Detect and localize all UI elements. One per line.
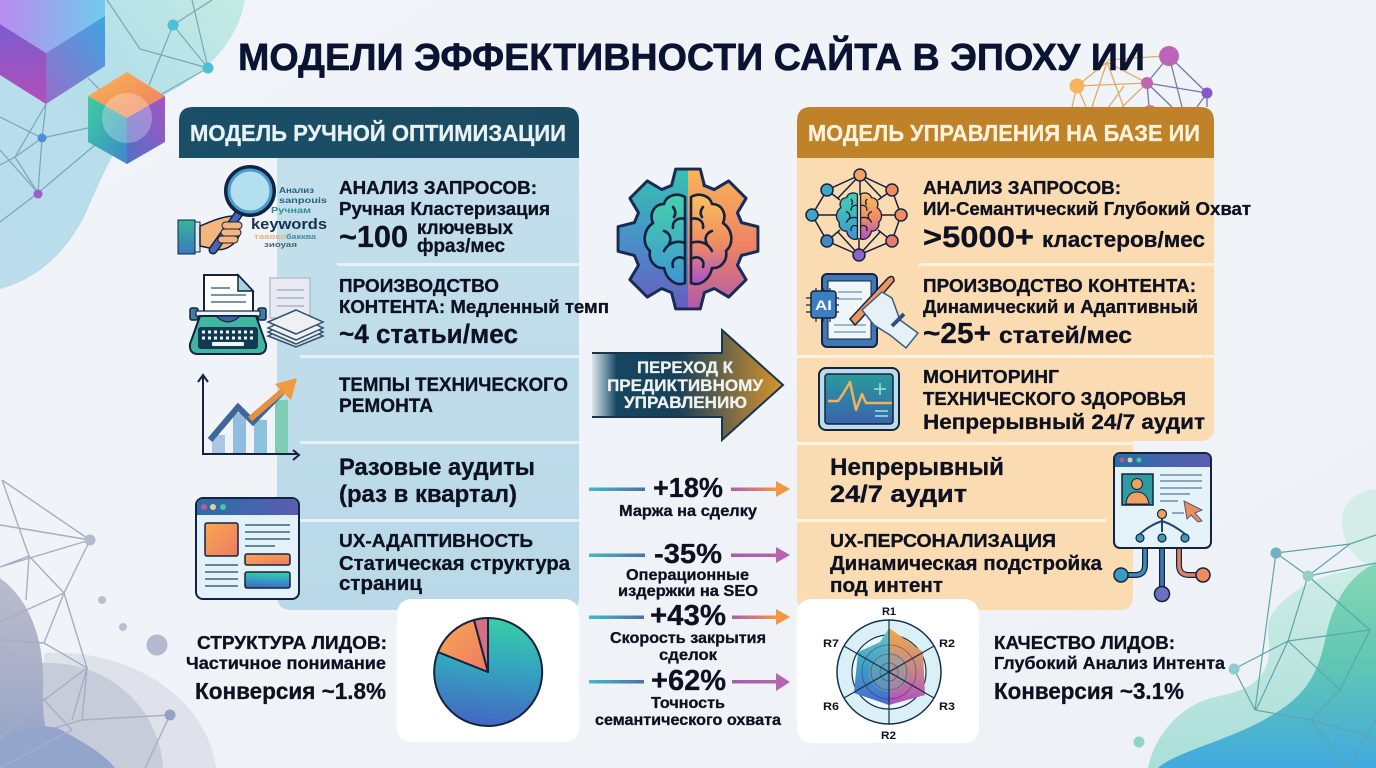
radar chart card: R7	[823, 638, 839, 650]
text block: UX personalization: Динамическая подстройка	[830, 553, 1103, 575]
text block: one-off audits: (раз в квартал)	[339, 481, 517, 508]
decoration: bottom-left blobs and network	[0, 480, 216, 768]
text block: query analysis: кластеров/мес	[1042, 227, 1205, 252]
text block: content production: статей/мес	[999, 322, 1132, 348]
text block: query analysis: Ручная Кластеризация	[339, 198, 550, 219]
panel body	[277, 158, 579, 610]
icon: AI tablet and robot hand: AI	[815, 297, 832, 313]
text block: query analysis: ~100	[339, 219, 408, 254]
text block: technical health monitoring: МОНИТОРИНГ	[923, 366, 1060, 387]
text block: technical health monitoring: Непрерывный 24/7 аудит	[923, 411, 1205, 434]
icon: browser window static layout	[196, 498, 299, 599]
icon: growth chart	[198, 375, 299, 460]
metric: semantic coverage accuracy: +62%	[651, 665, 726, 697]
panel header	[797, 107, 1214, 158]
text block: query analysis: ИИ-Семантический Глубокий Охват	[923, 198, 1251, 219]
text block: lead quality: Глубокий Анализ Интента	[994, 653, 1225, 673]
metric: semantic coverage accuracy: Точность	[651, 695, 725, 712]
text block: query analysis: АНАЛИЗ ЗАПРОСОВ:	[339, 177, 537, 198]
icon: gear with brain	[618, 169, 758, 309]
text block: UX personalization	[830, 530, 1103, 597]
text block: continuous audit: 24/7 аудит	[830, 481, 967, 508]
metric: SEO operating costs	[589, 538, 790, 600]
icon: magnifier with hand and keywords: sanpouis	[279, 196, 328, 205]
text block: technical health monitoring: ТЕХНИЧЕСКОГО ЗДОРОВЬЯ	[923, 388, 1186, 409]
text block: content production: ПРОИЗВОДСТВО КОНТЕНТА:	[923, 275, 1196, 296]
metric: margin per deal	[589, 472, 790, 520]
icon: personalized browser with branches	[1114, 453, 1211, 602]
text block: technical repair pace: ТЕМПЫ ТЕХНИЧЕСКОГО	[339, 375, 568, 396]
text block: lead structure	[186, 632, 387, 704]
text block: query analysis	[923, 177, 1251, 254]
arrow: transition to predictive management: ПРЕДИКТИВНОМУ	[607, 376, 763, 395]
text block: UX adaptivity: страниц	[339, 573, 423, 595]
icon: brain in neural network	[806, 169, 907, 261]
arrow: transition to predictive management	[592, 330, 783, 440]
text block: technical repair pace	[339, 375, 568, 417]
radar chart card: R1	[882, 606, 896, 618]
text block: one-off audits: Разовые аудиты	[339, 454, 535, 481]
icon: magnifier with hand and keywords: Анализ	[279, 186, 314, 195]
text block: query analysis	[339, 177, 550, 257]
decoration: top-right network	[1070, 46, 1212, 119]
text block: one-off audits	[339, 454, 535, 508]
text block: content production: КОНТЕНТА: Медленный темп	[339, 296, 609, 317]
icon: magnifier with hand and keywords: keywords	[251, 216, 327, 233]
metric: deal closing speed	[589, 600, 790, 664]
panel body	[797, 158, 1214, 610]
arrow: transition to predictive management: УПРАВЛЕНИЮ	[624, 393, 747, 412]
decoration: purple cube	[0, 0, 105, 104]
metric: SEO operating costs: -35%	[654, 538, 722, 569]
icon: magnifier with hand and keywords	[178, 168, 328, 254]
decoration: bottom-right blobs and network	[1134, 489, 1376, 768]
panel: AI management model	[797, 107, 1251, 610]
panel header	[179, 107, 579, 158]
text block: UX adaptivity	[339, 530, 571, 595]
radar chart card	[797, 599, 979, 743]
text block: content production: Динамический и Адаптивный	[923, 296, 1198, 317]
text block: content production: ~4 статьи/мес	[339, 319, 518, 349]
text block: content production: ~25+	[923, 318, 991, 350]
text block: query analysis: >5000+	[923, 221, 1034, 254]
panel heading: МОДЕЛЬ РУЧНОЙ ОПТИМИЗАЦИИ	[190, 119, 566, 146]
panel heading: МОДЕЛЬ УПРАВЛЕНИЯ НА БАЗЕ ИИ	[808, 120, 1200, 146]
text block: technical health monitoring	[923, 366, 1205, 434]
text block: technical repair pace: РЕМОНТА	[339, 396, 433, 417]
decoration: top-left blob and network	[0, 0, 245, 289]
metric: deal closing speed: сделок	[659, 647, 717, 664]
metric: semantic coverage accuracy: семантического охвата	[595, 712, 781, 729]
metric: deal closing speed: Скорость закрытия	[610, 630, 766, 647]
text block: lead quality	[994, 632, 1225, 704]
text block: continuous audit: Непрерывный	[830, 454, 1004, 481]
text block: lead structure: СТРУКТУРА ЛИДОВ:	[197, 632, 387, 653]
icon: magnifier with hand and keywords: Ручнам	[271, 206, 311, 215]
metric: semantic coverage accuracy	[589, 665, 790, 729]
text block: query analysis: ключевых	[417, 218, 513, 239]
text block: UX adaptivity: Статическая структура	[339, 553, 571, 575]
metric: SEO operating costs: Операционные	[626, 567, 749, 584]
metric: SEO operating costs: издержки на SEO	[618, 583, 758, 600]
text block: content production	[923, 275, 1198, 350]
icon: typewriter and paper stack	[190, 275, 323, 354]
text block: query analysis: АНАЛИЗ ЗАПРОСОВ:	[923, 177, 1121, 198]
metric: deal closing speed: +43%	[650, 600, 726, 632]
icon: health monitor	[819, 368, 899, 430]
text block: lead quality: КАЧЕСТВО ЛИДОВ:	[994, 632, 1175, 653]
icon: magnifier with hand and keywords: бакква	[286, 233, 316, 241]
panel: manual optimization model	[179, 107, 609, 610]
decoration: colored hexagon cube	[88, 72, 165, 164]
radar chart card: R6	[823, 701, 839, 713]
radar chart card: R3	[939, 701, 955, 713]
text block: query analysis: фраз/мес	[417, 236, 505, 257]
text block: UX personalization: под интент	[830, 575, 943, 597]
title: МОДЕЛИ ЭФФЕКТИВНОСТИ САЙТА В ЭПОХУ ИИ	[238, 34, 1145, 79]
pie chart card	[397, 599, 579, 742]
radar chart card: R2	[881, 730, 896, 742]
icon: magnifier with hand and keywords: зиоуая	[264, 242, 297, 249]
text block: lead quality: Конверсия ~3.1%	[994, 678, 1184, 704]
metric: margin per deal: Маржа на сделку	[619, 503, 757, 520]
icon: AI tablet and robot hand	[806, 274, 918, 348]
text block: UX adaptivity: UX-АДАПТИВНОСТЬ	[339, 530, 533, 551]
text block: lead structure: Конверсия ~1.8%	[195, 678, 386, 704]
radar chart card: R2	[939, 638, 955, 650]
metric: margin per deal: +18%	[653, 472, 723, 503]
text block: UX personalization: UX-ПЕРСОНАЛИЗАЦИЯ	[830, 530, 1056, 551]
text block: continuous audit	[830, 454, 1004, 508]
text block: content production	[339, 275, 609, 349]
arrow: transition to predictive management: ПЕРЕХОД К	[637, 358, 734, 377]
icon: magnifier with hand and keywords: тааоко	[254, 234, 286, 241]
text block: content production: ПРОИЗВОДСТВО	[339, 275, 499, 296]
text block: lead structure: Частичное понимание	[186, 653, 386, 673]
